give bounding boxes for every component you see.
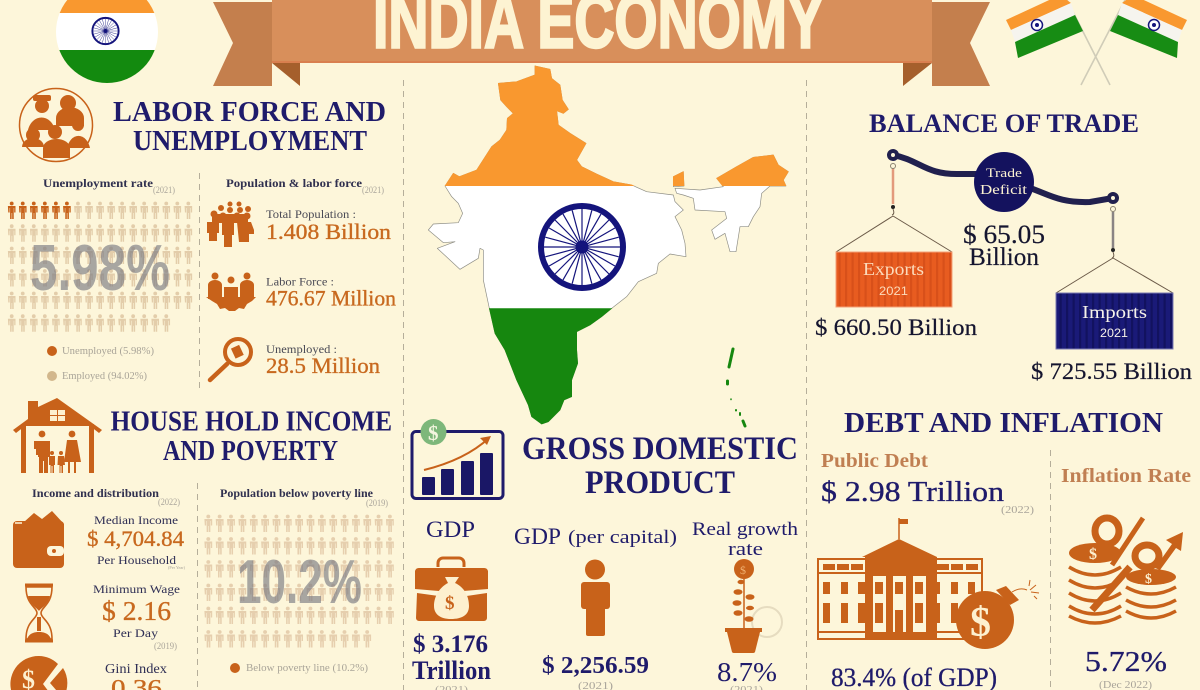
stat: labor force [266,275,396,311]
stat: GDP [412,631,492,690]
stat: imports value: $ 725.55 Billion [1031,359,1193,384]
map of India in flag colours [428,66,788,426]
label: GDP: GDP [426,517,475,542]
label: real growth rate: rate [728,539,763,560]
panel: debt and inflation [818,407,1191,690]
legend: unemployment: Unemployed (5.98%) [62,346,155,357]
heading: household income: HOUSE HOLD INCOME [111,407,392,438]
stat: median income: $ 4,704.84 [87,526,184,551]
stat: minimum wage [93,582,180,651]
heading: household income [111,407,392,467]
icon: government building with bomb [818,518,1039,649]
container: exports [836,164,952,307]
container: imports [1056,206,1173,349]
stat: GDP per capital: $ 2,256.59 [542,653,649,679]
stat: exports value: $ 660.50 Billion [815,315,978,340]
stat: inflation value [1085,647,1167,690]
stat: median income [87,513,186,570]
icon: government building with bomb: $ [970,600,991,646]
callout: trade deficit: Deficit [980,183,1027,198]
heading: gdp: PRODUCT [585,465,735,501]
stat: minimum wage: (2019) [154,641,177,651]
label: GDP per capital: (per capital) [568,527,677,548]
label: public debt: Public Debt [821,450,928,472]
icon: magnifier [210,339,251,380]
stat: real growth: 8.7% [717,657,777,687]
population heading: (2021) [362,185,384,195]
container: imports: 2021 [1100,326,1128,340]
icon: growth plant: $ [740,563,746,577]
stat: gini index: Gini Index [105,662,167,677]
stat: labor force: Labor Force : [266,275,334,289]
stat: gini index [105,662,167,690]
income and distribution heading [32,488,180,507]
unemployment rate heading: Unemployment rate [43,178,153,190]
pictogram: poverty people [204,515,394,648]
icon: population crowd [207,202,254,247]
icon: briefcase with money bag: $ [445,593,454,614]
icon: person [581,560,610,636]
stat: minimum wage: Minimum Wage [93,582,180,596]
icon: house with family [13,398,102,473]
container: exports: Exports [863,259,924,279]
icon: crossed flags [1006,0,1187,85]
stat: debt value: (2022) [1001,505,1035,516]
container: imports: Imports [1082,302,1147,322]
stat: deficit value [963,220,1045,271]
crane cable [889,151,1117,202]
big number 5.98%: 5.98% [30,231,170,304]
pictogram: unemployment people [8,202,192,332]
container: exports: 2021 [879,284,908,298]
unemployment rate heading [43,178,175,195]
stat: total population [266,207,391,244]
callout: trade deficit: Trade [986,165,1022,180]
icon: growth chart: $ [428,421,438,445]
icon: growth plant [725,559,782,653]
stat: median income: Median Income [94,513,178,527]
stat: total population: Total Population : [266,207,356,221]
heading: debt and inflation: DEBT AND INFLATION [844,407,1163,439]
heading: gdp: GROSS DOMESTIC [522,431,798,467]
title banner [213,0,990,86]
stat: minimum wage: Per Day [113,626,158,640]
icon: coins, percent and arrow [1069,518,1183,623]
legend: poverty: Below poverty line (10.2%) [246,663,369,674]
stat: deficit value: $ 65.05 [963,220,1045,249]
stat: median income: Per Household [97,553,176,567]
label: GDP per capital [514,524,677,549]
poverty heading: Population below poverty line [220,488,373,500]
stat: inflation value: 5.72% [1085,647,1167,678]
legend: unemployment [47,346,155,382]
label: GDP per capital: GDP [514,524,561,549]
income and distribution heading: Income and distribution [32,488,160,500]
label: real growth rate: Real growth [692,519,799,540]
stat: minimum wage: $ 2.16 [102,596,171,626]
stat: unemployed: 28.5 Million [266,353,380,378]
stat: GDP: $ 3.176 [413,631,488,658]
icon: workers circle [20,88,92,162]
stat: GDP per capital [542,653,649,690]
stat: median income: (Per Year) [168,565,186,570]
heading: gdp [522,431,798,501]
panel: labor force and unemployment [8,88,396,382]
stat: deficit value: Billion [969,244,1039,271]
panel: gross domestic product [412,419,799,690]
population heading: Population & labor force [226,178,362,190]
stat: total population: 1.408 Billion [266,219,391,244]
heading: labor force: UNEMPLOYMENT [133,126,367,157]
heading: household income: AND POVERTY [163,436,338,467]
icon: gini pie [10,656,67,690]
heading: labor force [113,97,386,157]
panel: household income and poverty [10,398,394,690]
poverty heading: (2019) [366,498,388,508]
islands [728,349,745,426]
heading: labor force: LABOR FORCE AND [113,97,386,128]
population heading [226,178,384,195]
big number 10.2%: 10.2% [237,548,362,617]
stat: debt value: $ 2.98 Trillion [821,476,1005,508]
stat: labor force: 476.67 Million [266,286,396,311]
unemployment rate heading: (2021) [153,185,175,195]
icon: briefcase with money bag [415,558,488,621]
stat: unemployed [266,342,380,378]
stat: debt value [821,476,1035,516]
section dividers [198,80,1050,690]
icon: hourglass [25,585,53,641]
icon: wallet [13,511,64,568]
icon: labor force gear [206,272,256,311]
label: inflation rate: Inflation Rate [1061,465,1191,487]
icon: coins, percent and arrow: $ [1145,572,1152,587]
icon: round India flag [56,0,158,83]
stat: unemployed: Unemployed : [266,342,337,356]
label: real growth rate [692,519,799,560]
icon: ashoka chakra [541,206,623,288]
icon: growth chart [412,419,503,498]
poverty heading [220,488,388,508]
stat: GDP: Trillion [412,656,492,685]
panel: balance of trade [815,109,1193,384]
icon: coins, percent and arrow: $ [1089,546,1097,563]
income and distribution heading: (2022) [158,497,180,507]
callout: trade deficit [974,152,1034,212]
legend: unemployment: Employed (94.02%) [62,371,147,382]
heading: balance of trade: BALANCE OF TRADE [869,109,1139,138]
